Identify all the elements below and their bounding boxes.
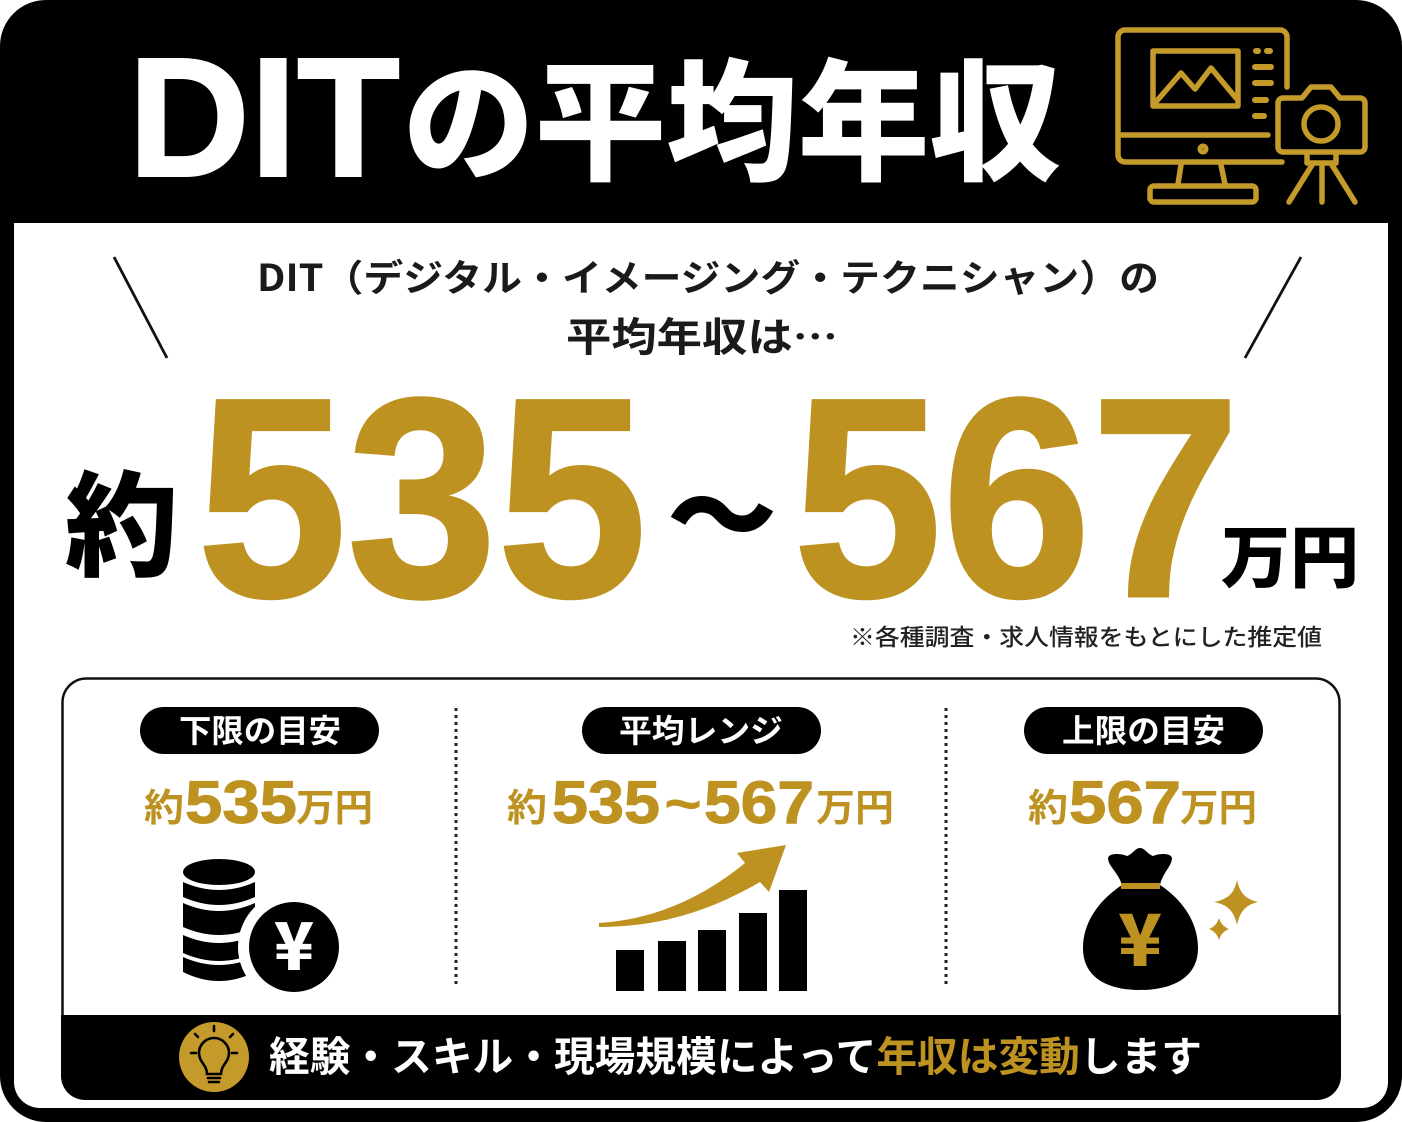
icon: sparkles	[1209, 880, 1258, 940]
main figure: 567	[793, 340, 1240, 657]
column: average range: 567	[704, 769, 814, 836]
icon: monitor and camera	[1118, 30, 1365, 202]
column: upper bound	[1024, 706, 1263, 990]
subtitle	[257, 248, 1159, 363]
icon: coin stack: ¥	[274, 894, 314, 990]
icon: money bag: ¥	[1118, 882, 1162, 987]
subtitle: 平均年収は…	[566, 305, 838, 363]
main figure: 535	[197, 340, 647, 657]
callout bar	[61, 1015, 1341, 1100]
icon: growth chart	[599, 845, 807, 991]
callout text: 経験・スキル・現場規模によって年収は変動します	[269, 1023, 1202, 1083]
column: upper bound: 万円	[1180, 777, 1257, 832]
main figure: ～	[667, 428, 777, 588]
column: lower bound: 535	[185, 769, 297, 836]
column: lower bound: 約	[144, 777, 184, 832]
icon: money bag	[1083, 848, 1258, 990]
main figure	[65, 340, 1359, 657]
main figure: 約	[65, 435, 178, 600]
column: average range: 万円	[816, 777, 894, 832]
column: lower bound: 万円	[296, 777, 373, 832]
column: upper bound: 約	[1028, 777, 1068, 832]
panel: summary	[61, 678, 1341, 1100]
subtitle: DIT（デジタル・イメージング・テクニシャン）の	[257, 248, 1159, 302]
slash decorations	[114, 257, 1301, 358]
column: upper bound: 567	[1069, 769, 1181, 836]
footnote: ※各種調査・求人情報をもとにした推定値	[850, 618, 1322, 652]
column: lower bound	[140, 706, 379, 1003]
column: lower bound: 下限の目安	[179, 706, 341, 752]
column: average range: 535	[552, 769, 660, 836]
title: DIT	[128, 23, 400, 213]
icon: coin stack	[183, 859, 350, 1003]
column: average range	[507, 706, 894, 991]
column: average range: 約	[507, 777, 547, 832]
column: average range: 平均レンジ	[619, 706, 783, 752]
icon: light bulb	[179, 1022, 249, 1092]
title	[128, 18, 1061, 213]
main figure: 万円	[1221, 503, 1359, 602]
column: upper bound: 上限の目安	[1062, 706, 1225, 752]
column: average range: ~	[664, 770, 702, 837]
title: の平均年収	[403, 18, 1061, 209]
